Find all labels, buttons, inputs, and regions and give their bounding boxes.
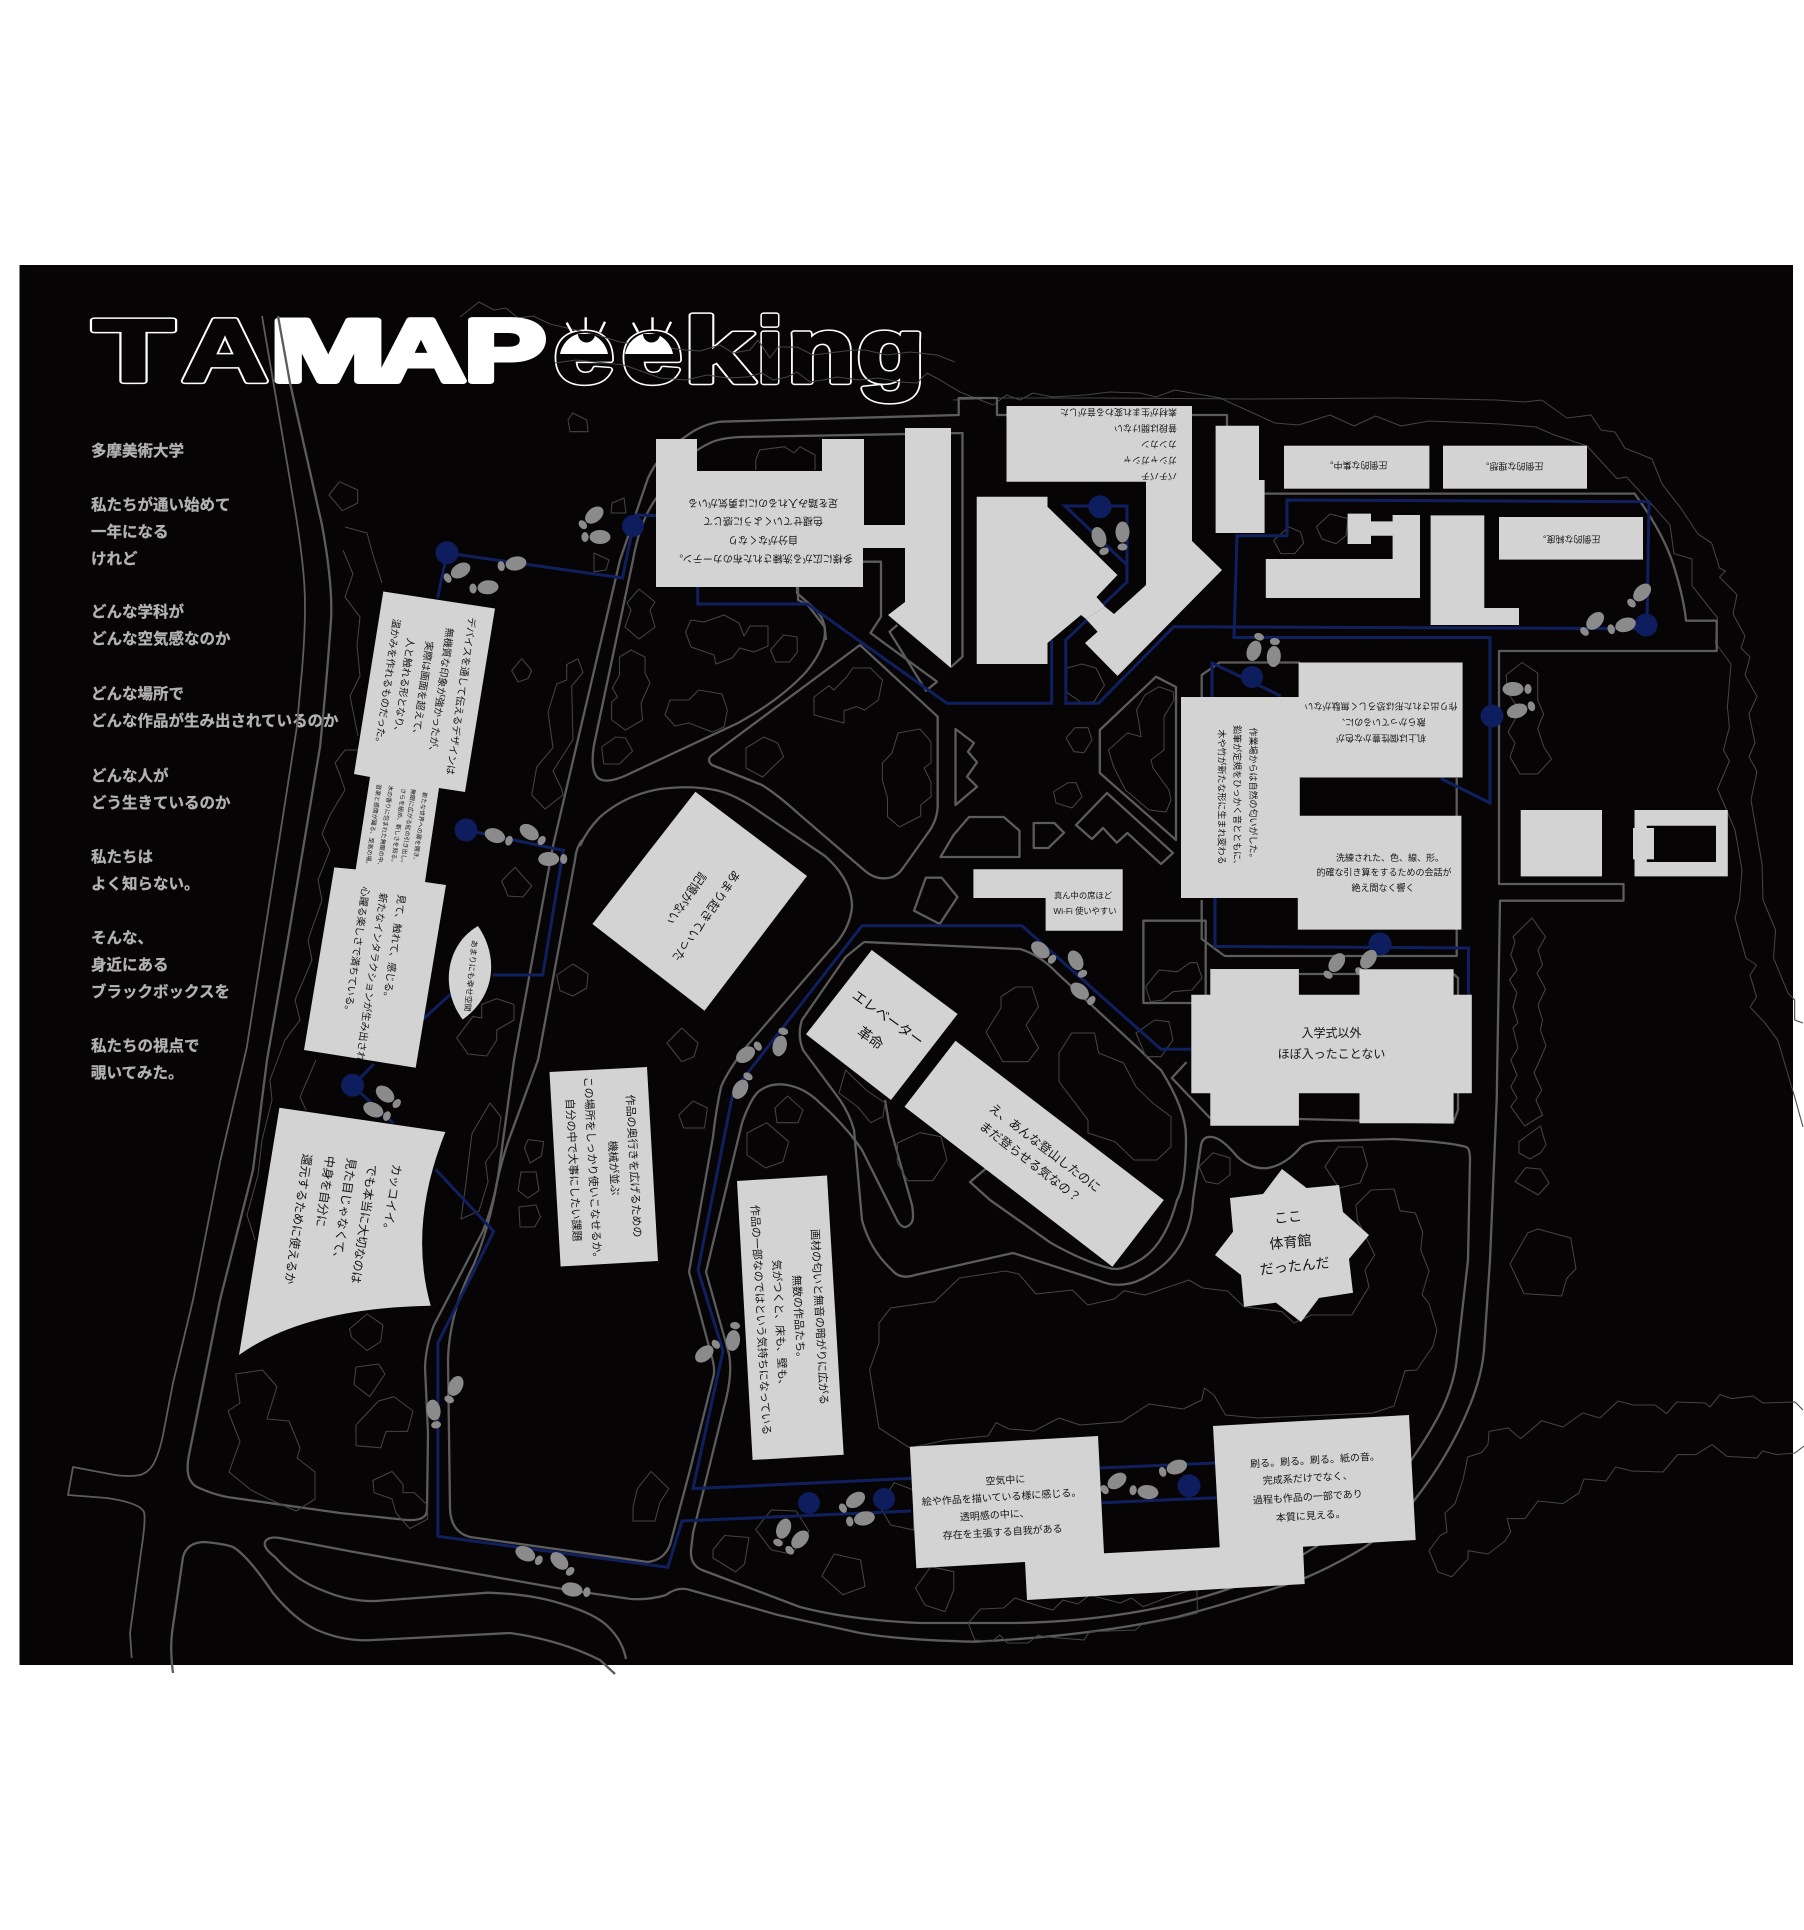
building: overwhelming concentration <box>1284 446 1429 489</box>
building: curved card: 見た目じゃなくて、 <box>330 1157 358 1265</box>
intro text: どんな空気感なのか <box>91 629 231 648</box>
title outlined letters: i <box>757 300 783 402</box>
building: elevator: 革命 <box>854 1023 887 1053</box>
building: design building cluster: 見て、触れて、感じる。 <box>380 893 408 1003</box>
building: bottom printing block: 本質に見える。 <box>1276 1507 1346 1524</box>
building: curtain hall: 色褪せていくように感じて <box>703 514 823 528</box>
building: bottom printing block: 完成系だけでなく、 <box>1262 1470 1353 1487</box>
building: former gym star: だったんだ <box>1259 1254 1330 1278</box>
intro text: どう生きているのか <box>91 794 231 812</box>
building: center block <box>977 497 1118 664</box>
title outlined letters: g <box>857 300 925 402</box>
building: curved card: 還元するために使えるか <box>282 1153 315 1285</box>
building: leaf shaped space <box>449 926 491 1020</box>
building: design building cluster: 新たなインタラクションが生み出され <box>353 892 390 1062</box>
building: former gym star <box>1215 1169 1369 1322</box>
building: former gym star: ここ <box>1273 1208 1303 1226</box>
building: bottom printing block: 刷る。刷る。刷る。紙の音。 <box>1250 1450 1380 1470</box>
title outlined letters: i <box>757 300 783 402</box>
title filled letters MAP: A <box>376 301 466 400</box>
building: art studio block: 絶え間なく響く <box>1351 882 1415 893</box>
title outlined letters: g <box>857 300 925 402</box>
title outlined letters: A <box>182 301 268 400</box>
building: cross shaped hall: 入学式以外 <box>1301 1025 1362 1040</box>
building: design building cluster: 無機質な印象が強かったが、 <box>426 627 456 757</box>
intro text: ブラックボックスを <box>91 982 230 1001</box>
building: design building cluster: 人と触れる形となり、 <box>391 637 417 737</box>
building: art studio block: 机上は個性豊かな色が <box>1336 733 1426 744</box>
intro text: 私たちが通い始めて <box>91 495 231 514</box>
building: overwhelming purity: 圧倒的な純度。 <box>1537 534 1601 545</box>
building: workshop with sounds text <box>1006 406 1222 676</box>
title outlined letters: e <box>554 300 614 402</box>
building: overwhelming concentration: 圧倒的な集中。 <box>1324 460 1388 471</box>
title outlined letters: A <box>182 301 268 400</box>
building: cross shaped hall: ほぼ入ったことない <box>1278 1047 1385 1061</box>
building: workshop with sounds text: 普段は開けない <box>1114 423 1177 434</box>
building: frame <box>1633 810 1728 876</box>
intro text: 身近にある <box>91 956 169 974</box>
building: design building cluster: 音楽と感情が踊る、至高の場。 <box>363 783 383 868</box>
building: design building cluster <box>304 592 495 1068</box>
building: bottom printing block: 絵や作品を描いている様に感じる。 <box>921 1486 1082 1508</box>
building: former gym star: 体育館 <box>1269 1232 1312 1252</box>
building: bottom printing block: 空気中に <box>985 1472 1026 1488</box>
title outlined letters: n <box>787 300 855 402</box>
title filled letters MAP <box>270 301 546 400</box>
title filled letters MAP: M <box>270 301 386 400</box>
building: painting: 気がつくと、床も、壁も、 <box>770 1259 790 1391</box>
building: workshop with sounds text: カンカン <box>1141 439 1177 449</box>
building: machines <box>550 1067 658 1266</box>
building: art studio block: 散らかっているのに、 <box>1336 717 1426 728</box>
building: curtain hall: 足を踏み入れるのには勇気がいる <box>688 496 838 510</box>
campus roads <box>68 316 1717 1674</box>
building: art studio block: 鉛筆が定規をひっかく音とともに、 <box>1232 725 1243 869</box>
building: art studio block: 洗練された、色、線、形。 <box>1336 852 1444 863</box>
building: bottom printing block: 存在を主張する自我がある <box>942 1522 1063 1542</box>
building: library small: 真ん中の席ほど <box>1054 891 1113 901</box>
building: library small <box>973 869 1123 931</box>
building: curved card <box>239 1108 445 1355</box>
intro text: 私たちの視点で <box>91 1036 200 1055</box>
route waypoint dots <box>341 495 1658 1514</box>
building: art studio block <box>1181 662 1463 930</box>
building: curtain hall <box>656 428 951 668</box>
intro text: どんな学科が <box>91 602 185 621</box>
walking route lines <box>353 500 1649 1567</box>
building: design building cluster: 温かみを作れるものだった。 <box>372 618 402 748</box>
title outlined letters: k <box>684 300 755 402</box>
building: square <box>1521 810 1602 876</box>
intro text: どんな場所で <box>91 685 184 703</box>
building: L shape <box>1266 514 1420 598</box>
building: workshop with sounds text: ガシャガシャ <box>1123 455 1177 465</box>
building: memory <box>592 792 807 1011</box>
title outlined letters: n <box>787 300 855 402</box>
building: painting: 画材の匂いと無音の暗がりに広がる <box>808 1229 831 1405</box>
building: workshop with sounds text: バチバチ <box>1141 471 1177 481</box>
intro text: 多摩美術大学 <box>91 441 184 460</box>
building: leaf shaped space: あまりにも幸せ空間 <box>462 939 479 1012</box>
building: design building cluster: 新たな世界への扉を開き、 <box>411 792 429 864</box>
intro text: どんな作品が生み出されているのか <box>91 711 339 730</box>
building: elevator <box>806 950 958 1100</box>
building: overwhelming purity <box>1499 517 1643 560</box>
title outlined letters: T <box>93 301 174 400</box>
building: painting <box>737 1176 844 1460</box>
title outlined letters: k <box>684 300 755 402</box>
building: design building cluster: 実際は画面を超えて、 <box>409 640 436 740</box>
building: bottom printing block: 透明感の中に、 <box>959 1506 1030 1524</box>
building: art studio block: 作業場からは自然の匂いがした。 <box>1248 727 1259 863</box>
trees <box>228 413 1804 1643</box>
title outlined letters: e <box>622 300 682 402</box>
intro text: よく知らない。 <box>91 874 200 893</box>
title outlined letters <box>93 300 925 402</box>
building: bottom printing block <box>910 1415 1416 1600</box>
intro text: 一年になる <box>91 522 169 541</box>
building: design building cluster: 心躍る楽しさで満ちている。 <box>341 886 372 1016</box>
building: machines: 自分の中で大事にしたい課題 <box>563 1098 584 1242</box>
building: design building cluster: さらを組め、新しさを知る。 <box>389 788 408 866</box>
building: workshop with sounds text: 素材が生まれ変わる音がした <box>1060 407 1177 418</box>
building: cross shaped hall <box>1191 969 1472 1126</box>
intro text: そんな、 <box>91 929 153 947</box>
building: long climbing block <box>904 1041 1164 1267</box>
building: memory: あまり起きていった <box>669 867 743 964</box>
building: curved card: 中身を自分に <box>313 1155 338 1228</box>
building: bottom printing block: 過程も作品の一部であり <box>1253 1488 1363 1507</box>
title outlined letters: e <box>554 300 614 402</box>
building: small tower <box>1216 426 1265 533</box>
building: painting: 無数の作品たち。 <box>790 1275 808 1363</box>
building: art studio block: 的確な引き算をするための会話が <box>1316 866 1452 878</box>
title outlined letters: T <box>93 301 174 400</box>
intro text: 私たちは <box>91 848 153 866</box>
building: art studio block: 木や竹が新たな形に生まれ変わる <box>1216 729 1228 865</box>
building: long climbing block: まだ登らせる気なの？ <box>977 1118 1084 1205</box>
building: curtain hall: 多様に広がる洗練された布のカーテン。 <box>673 552 853 565</box>
tree bands at top <box>460 302 1803 1127</box>
intro text: けれど <box>91 550 138 568</box>
building: memory: 記憶がない <box>663 869 710 927</box>
building: overwhelming ideal <box>1443 446 1587 489</box>
building: machines: この場所をしっかり使いこなせるか。 <box>581 1076 605 1264</box>
building: library small: Wi-Fi 使いやすい <box>1053 906 1117 916</box>
intro text: 覗いてみた。 <box>91 1064 184 1082</box>
building: design building cluster: 木の香りに包まれた無限の中、 <box>375 785 395 869</box>
building: tall L <box>1431 515 1519 625</box>
map panel background <box>20 265 1793 1665</box>
building: elevator: エレベーター <box>849 987 927 1049</box>
building: curtain hall: 自分がなくなり <box>728 534 798 546</box>
building: design building cluster: デバイスを通して伝えるデザインは <box>443 616 478 776</box>
building: curved card: でも本当に大切なのは <box>348 1164 379 1284</box>
building: machines: 機械が並ぶ <box>606 1140 622 1196</box>
building: long climbing block: え、あんな登山したのに <box>986 1100 1104 1195</box>
building: overwhelming ideal: 圧倒的な理想。 <box>1480 461 1544 472</box>
title filled letters MAP: P <box>464 301 546 400</box>
title eyes on the letters e <box>560 317 673 354</box>
building: curved card: カッコイイ。 <box>380 1163 404 1236</box>
building: design building cluster: 無限に広がる紅の引き出し。 <box>399 788 417 867</box>
building: machines: 作品の奥行きを広げるための <box>623 1094 645 1238</box>
building: art studio block: 作り出された形は恐ろしく無駄がない <box>1304 701 1458 712</box>
footprints <box>361 503 1654 1600</box>
title outlined letters: e <box>622 300 682 402</box>
intro text <box>91 441 339 1082</box>
intro text: どんな人が <box>91 766 169 785</box>
building: painting: 作品の一部なのではという気持ちになっている <box>748 1205 774 1435</box>
